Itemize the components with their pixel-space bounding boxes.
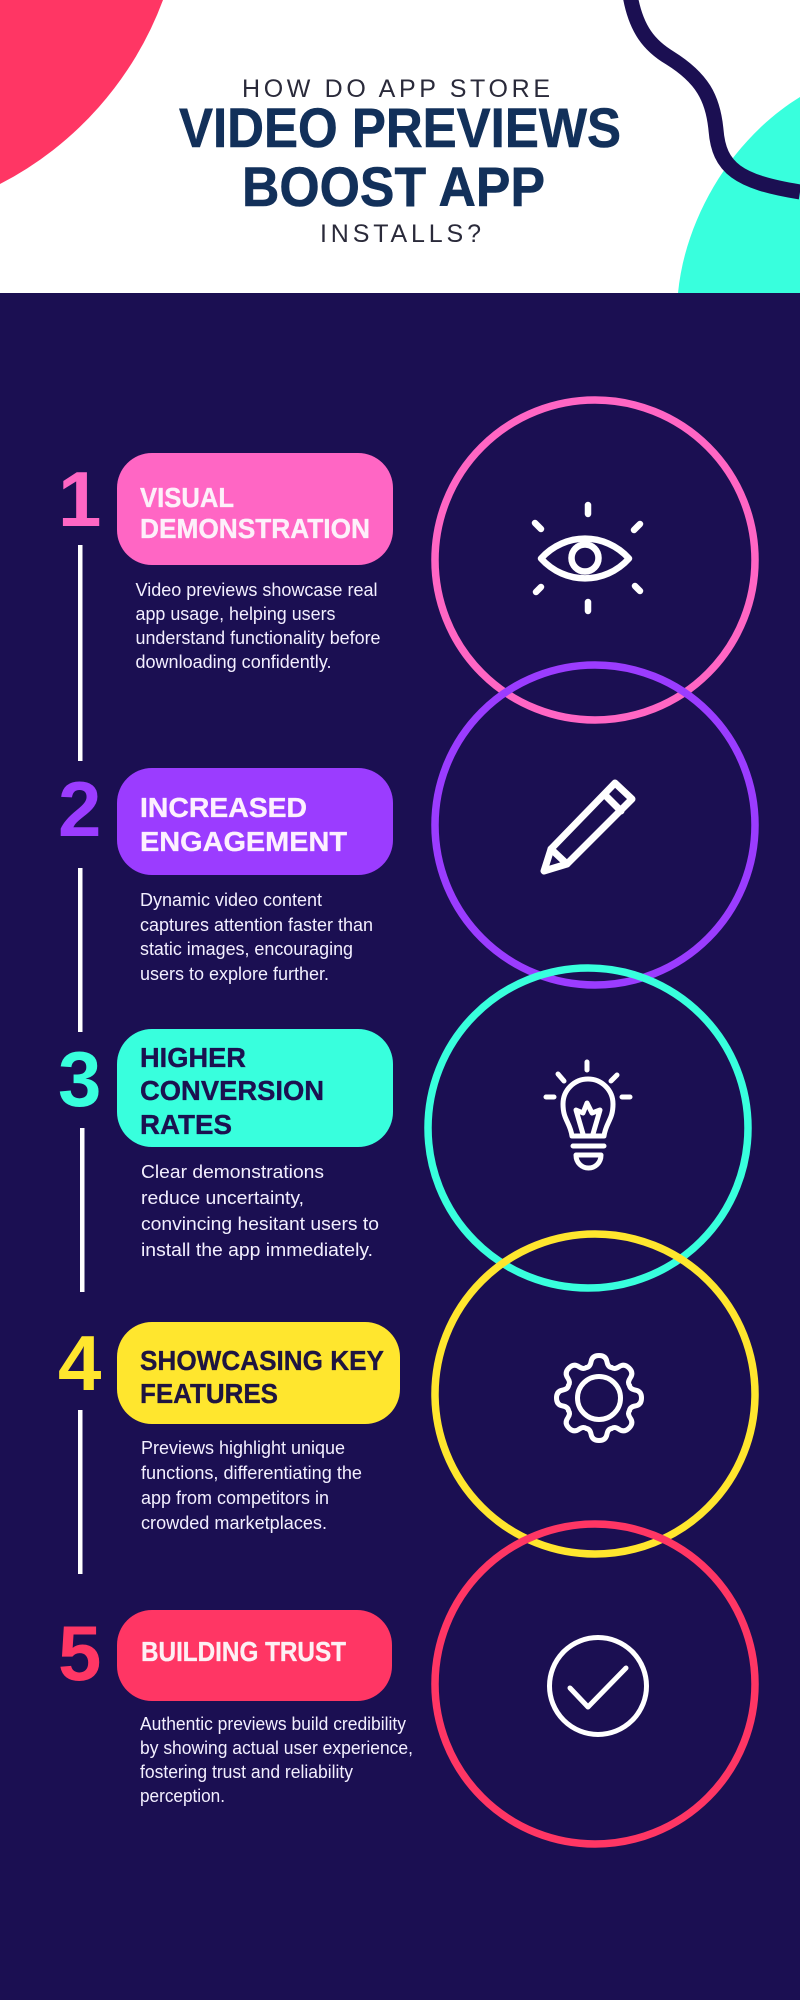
icon: pencil: [544, 783, 632, 871]
description 5: Authentic previews build credibility: [140, 1714, 406, 1734]
pill heading 1: VISUAL: [140, 482, 234, 513]
description 1: Video previews showcase real: [136, 580, 378, 600]
number 5: 5: [58, 1609, 101, 1697]
description 3: convincing hesitant users to: [141, 1214, 379, 1234]
pill heading 3: HIGHER: [140, 1042, 246, 1073]
pill heading 1: DEMONSTRATION: [140, 513, 370, 544]
description 3: Clear demonstrations: [141, 1162, 324, 1182]
description 1: understand functionality before: [136, 628, 380, 648]
description 4: crowded marketplaces.: [141, 1513, 327, 1533]
connector line 3: [80, 1128, 84, 1292]
item 2: increased engagement: [58, 765, 393, 1032]
description 2: Dynamic video content: [140, 890, 322, 910]
circle 4: yellow: [435, 1234, 755, 1554]
description 4: functions, differentiating the: [141, 1463, 362, 1483]
pill heading 3: CONVERSION: [140, 1075, 324, 1106]
description 4: [141, 1438, 362, 1533]
description 1: [136, 580, 380, 672]
description 3: install the app immediately.: [141, 1240, 373, 1260]
circle 1: pink: [435, 400, 755, 720]
pill heading 3: RATES: [140, 1109, 232, 1140]
description 4: app from competitors in: [141, 1488, 329, 1508]
icon: eye: [535, 505, 640, 611]
circle 3: teal: [428, 968, 748, 1288]
description 2: [140, 890, 373, 984]
connector line 4: [78, 1410, 82, 1574]
number 1: 1: [58, 455, 101, 543]
number 2: 2: [58, 765, 101, 853]
item 5: building trust: [58, 1609, 413, 1806]
number 3: 3: [58, 1035, 101, 1123]
decoration: navy curve: [630, 0, 800, 192]
circle 5: red: [435, 1524, 755, 1844]
description 3: [141, 1162, 379, 1260]
pill heading 4: [117, 1322, 400, 1424]
icon: gear: [556, 1356, 642, 1440]
description 5: perception.: [140, 1786, 225, 1806]
title: BOOST APP: [242, 155, 545, 218]
pill heading 5: [117, 1610, 392, 1701]
pill heading 3: [117, 1029, 393, 1147]
number 4: 4: [58, 1319, 101, 1407]
decoration: red blob: [0, 0, 163, 184]
description 5: [140, 1714, 413, 1806]
circle 2: purple: [435, 665, 755, 985]
title: [179, 75, 621, 248]
description 2: captures attention faster than: [140, 915, 373, 935]
description 1: downloading confidently.: [136, 652, 332, 672]
item 3: higher conversion rates: [58, 1029, 393, 1292]
connector line 1: [78, 545, 82, 761]
description 1: app usage, helping users: [136, 604, 336, 624]
title: HOW DO APP STORE: [242, 75, 550, 103]
description 3: reduce uncertainty,: [141, 1188, 304, 1208]
pill heading 2: [117, 768, 393, 875]
icon: light bulb: [546, 1062, 630, 1168]
title: INSTALLS?: [320, 220, 481, 248]
pill heading 2: INCREASED: [140, 792, 307, 823]
description 2: users to explore further.: [140, 964, 329, 984]
title: VIDEO PREVIEWS: [179, 96, 621, 159]
icon: check mark: [550, 1638, 646, 1734]
item 1: visual demonstration: [58, 453, 393, 761]
description 2: static images, encouraging: [140, 939, 353, 959]
item 4: showcasing key features: [58, 1319, 400, 1574]
pill heading 1: [117, 453, 393, 565]
description 4: Previews highlight unique: [141, 1438, 345, 1458]
description 5: by showing actual user experience,: [140, 1738, 413, 1758]
pill heading 2: ENGAGEMENT: [140, 826, 347, 857]
pill heading 5: BUILDING TRUST: [141, 1636, 346, 1667]
pill heading 4: FEATURES: [140, 1378, 278, 1409]
pill heading 4: SHOWCASING KEY: [140, 1345, 384, 1376]
description 5: fostering trust and reliability: [140, 1762, 353, 1782]
connector line 2: [78, 868, 82, 1032]
decoration: teal blob: [678, 97, 800, 293]
header panel: [0, 0, 800, 293]
